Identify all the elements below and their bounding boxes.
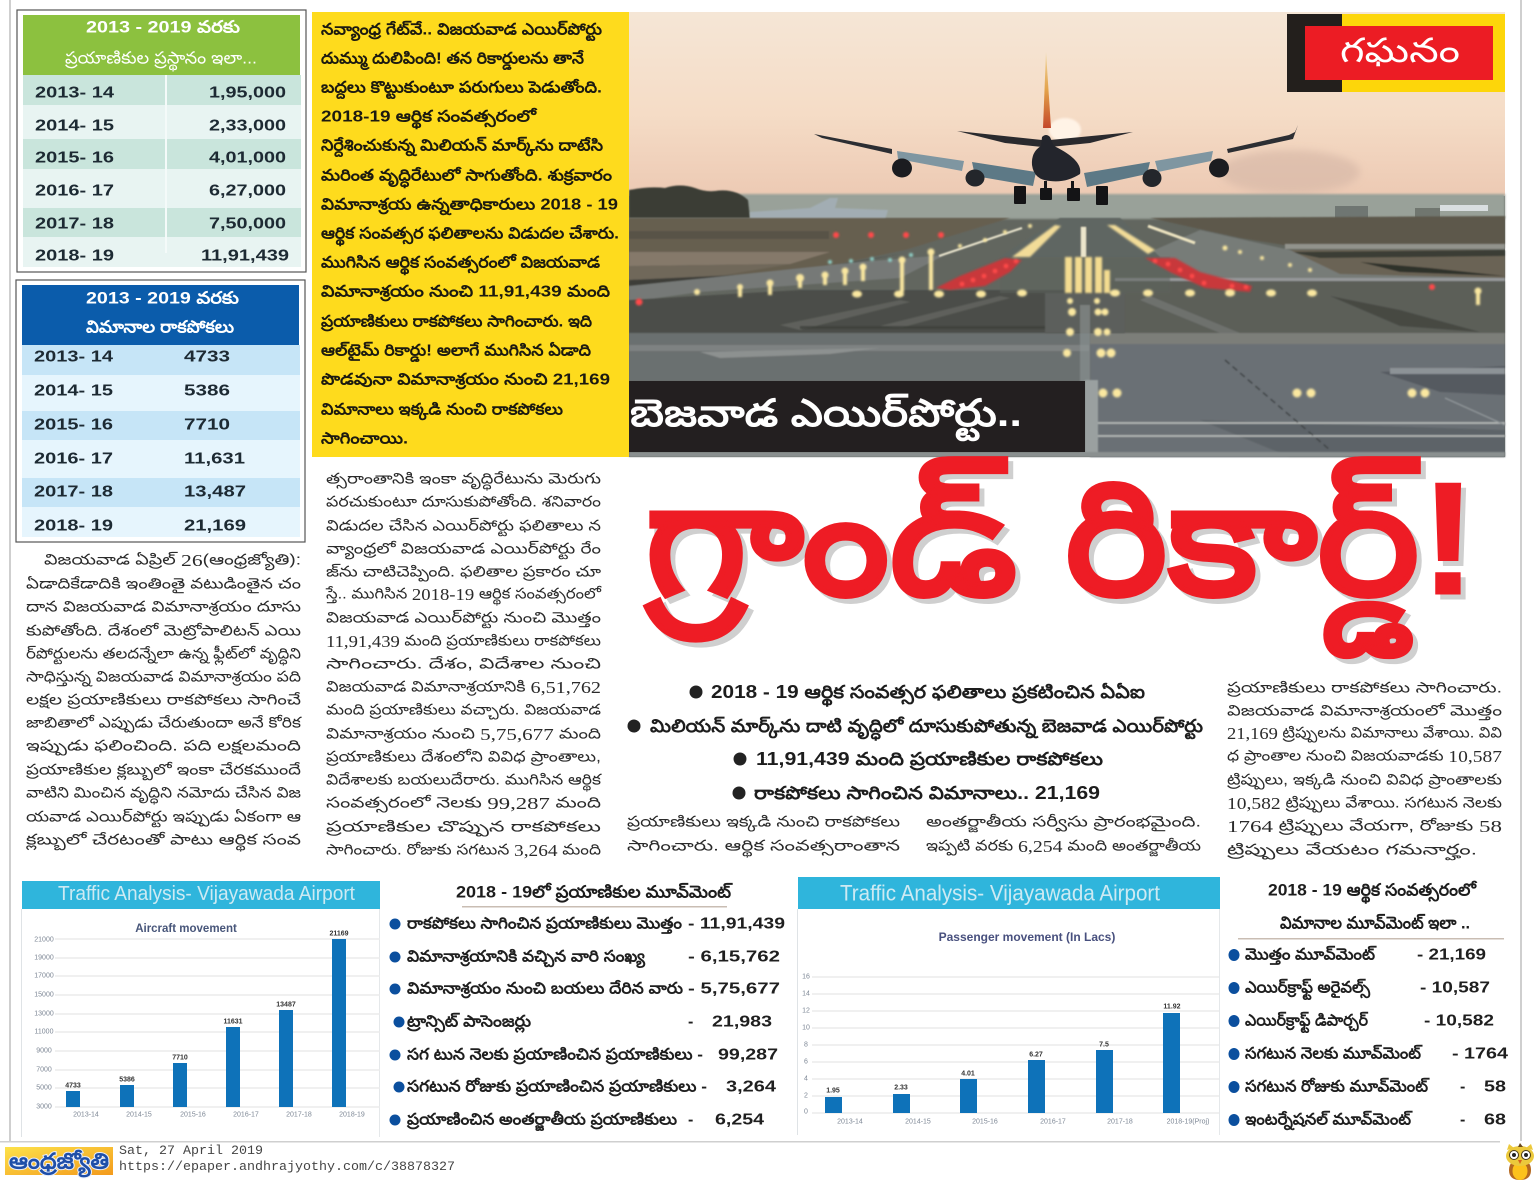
panel: passenger movement chart: Passenger movement (In Lacs) [939, 930, 1115, 944]
panel: yellow intro text: బద్దలు కొట్టుకుంటూ పరుగులు పెడుతోంది. [321, 78, 602, 100]
article text: column 5: విజయవాడ విమానాశ్రయంలో మొత్తం [1227, 702, 1503, 720]
article text: column 3 [627, 814, 900, 858]
panel: aircraft movement chart: 17000 [34, 972, 54, 980]
panel: yellow intro text: విమానాలు ఇక్కడి నుంచి రాకపోకలు [321, 402, 564, 420]
panel: aircraft movement list: - 1764 [1452, 1046, 1508, 1062]
panel: aircraft movement chart: 3000 [36, 1104, 52, 1110]
panel: passenger movement list: - 5,75,677 [688, 980, 780, 998]
article text: column 2: వ్యాంధ్రలో విజయవాడ ఎయిర్‌పోర్టు రేం [326, 540, 601, 560]
article text: column 1: ర్‌పోర్టులను తలదన్నేలా ఉన్న ఫ్లీట్‌లో వృద్ధిని [26, 644, 301, 666]
panel: passenger movement list: సగ టున నెలకు ప్రయాణించిన ప్రయాణికులు - [407, 1046, 703, 1064]
panel: passenger movement list: ట్రాన్సిట్ పాసెంజర్లు [406, 1012, 531, 1034]
aircraft [814, 52, 1298, 205]
panel: aircraft movement list: ఎయిర్‌క్రాఫ్ట్ అరైవల్స్ [1245, 978, 1371, 1000]
article text: column 1: కుపోతోంది. దేశంలో మెట్రోపాలిటన్ ఎయి [26, 622, 301, 640]
panel: flights table [16, 280, 305, 542]
panel: yellow intro text: నిర్దేశించుకున్న మిలియన్ మార్క్‌ను దాటేసి [321, 136, 603, 158]
panel: passenger movement chart: 4 [804, 1076, 808, 1082]
table rows: 2015- 16 [35, 150, 114, 166]
table rows: 1,95,000 [209, 84, 286, 102]
panel: passenger movement list: రాకపోకలు సాగించిన ప్రయాణికులు మొత్తం [407, 916, 682, 934]
table rows: 2016- 17 [35, 182, 114, 200]
panel: aircraft movement chart: 9000 [36, 1048, 52, 1054]
article text: column 5: 10,582 ట్రిప్పులు వేశాయి. సగటున నెలకు [1227, 794, 1502, 814]
panel: passenger movement chart: 2016-17 [1040, 1118, 1066, 1126]
panel: aircraft movement chart: 15000 [34, 992, 54, 998]
article text: column 2: సాగించారు. దేశం, విదేశాల నుంచి [326, 656, 601, 672]
table rows: 2015- 16 [34, 416, 113, 434]
table rows: 2018- 19 [34, 518, 113, 534]
panel: yellow intro text: పొడవునా విమానాశ్రయం నుంచి 21,169 [321, 372, 610, 390]
article text: column 2: స్తే.. ముగిసిన 2018-19 ఆర్థిక సంవత్సరంలో [325, 584, 603, 606]
panel: aircraft movement list: - [1460, 1078, 1465, 1096]
article text: column 2: విజయవాడ విమానాశ్రయానికి 6,51,762 [326, 678, 601, 696]
table rows [23, 75, 301, 267]
panel: passenger movement list: - [688, 1112, 693, 1128]
article text: column 1: వాటిని మించిన వృద్ధిని నమోదు చేసిన విజ [26, 784, 301, 804]
panel: aircraft movement chart: 21000 [34, 936, 54, 944]
panel: passenger movement chart: 8 [804, 1042, 808, 1048]
table header: blue: 2013 - 2019 వరకు [86, 288, 239, 308]
panel: passenger movement list: 21,983 [712, 1014, 772, 1030]
panel: aircraft movement chart: 13487 [276, 1002, 296, 1008]
sub-headlines: మిలియన్ మార్క్‌ను దాటి వృద్ధిలో దూసుకుపోతున్న బెజవాడ ఎయిర్‌పోర్టు [650, 716, 1203, 741]
panel: passenger movement list: ప్రయాణించిన అంతర్జాతీయ ప్రయాణికులు [406, 1110, 677, 1132]
table rows: 2016- 17 [34, 450, 113, 468]
panel: yellow intro text [312, 12, 629, 457]
article text: column 2: 11,91,439 మంది ప్రయాణికులు రాకపోకలు [326, 632, 601, 650]
sub-headlines: 2018 - 19 ఆర్థిక సంవత్సర ఫలితాలు ప్రకటించిన ఏఏఐ [711, 682, 1145, 707]
article text: column 5 [1226, 680, 1503, 860]
panel: passenger movement list: సగటున రోజుకు ప్రయాణించిన ప్రయాణికులు - [407, 1078, 707, 1096]
panel: aircraft movement list: సగటున రోజుకు మూవ్‌మెంట్ [1245, 1078, 1430, 1096]
panel: passenger movement chart: 6 [804, 1058, 808, 1066]
article text: column 5: ప్రయాణికులు రాకపోకలు సాగించారు. [1227, 680, 1502, 698]
panel: aircraft movement list: 58 [1484, 1078, 1506, 1096]
table header: green: ప్రయాణికుల ప్రస్థానం ఇలా... [65, 48, 257, 72]
red approach lights [936, 258, 1022, 290]
sub-headlines: రాకపోకలు సాగించిన విమానాలు.. 21,169 [754, 783, 1100, 803]
panel: passenger movement list: - 6,15,762 [688, 948, 780, 966]
table rows [22, 345, 300, 537]
article text: column 2: ప్రయాణికుల చొప్పున రాకపోకలు [326, 818, 601, 838]
panel: aircraft movement list: ఇంటర్నేషనల్ మూవ్‌మెంట్ [1245, 1110, 1413, 1130]
panel: passenger movement chart: 2013-14 [837, 1118, 863, 1126]
table rows: 2018- 19 [35, 248, 114, 264]
panel: passengers table [17, 10, 306, 272]
panel: passenger movement chart: 2015-16 [972, 1118, 998, 1126]
table rows: 11,631 [184, 450, 245, 468]
badge: ఘనం label: గఘనం [1340, 32, 1460, 70]
runway centre strip [629, 218, 1505, 457]
panel: yellow intro text: దుమ్ము దులిపింది! తన రికార్డులను తానే [321, 50, 585, 70]
article text: column 5: 21,169 ట్రిప్పులను విమానాలు వేశాయి. వివి [1227, 724, 1502, 744]
panel: passenger movement chart [797, 877, 1220, 1135]
article text: column 1 [25, 550, 302, 852]
article text: column 2: విదేశాలకు బయలుదేరారు. ముగిసిన ఆర్థిక [326, 772, 602, 792]
panel: passenger movement chart: 2014-15 [905, 1118, 931, 1126]
main headline: గ్రాండ్ రికార్డ్! [643, 449, 1477, 659]
panel: aircraft movement list: - [1460, 1112, 1465, 1128]
badge: ఘనం label [1287, 14, 1505, 92]
table header: green [23, 15, 300, 75]
list heading: విమానాల మూవ్‌మెంట్ ఇలా .. [1280, 914, 1470, 932]
article text: column 2: విమానాశ్రయం నుంచి 5,75,677 మంది [326, 724, 602, 744]
panel: yellow intro text: ముగిసిన ఆర్థిక సంవత్సరంలో విజయవాడ [321, 252, 600, 276]
panel: passenger movement list: - [688, 1014, 693, 1030]
article text: column 5: ధ ప్రాంతాల నుంచి విజయవాడకు 10,587 [1227, 746, 1503, 766]
panel: aircraft movement list: ఎయిర్‌క్రాఫ్ట్ డిపార్చర్ [1245, 1012, 1368, 1034]
sub-headlines [628, 682, 1203, 803]
panel: passenger movement chart: 2.33 [894, 1084, 908, 1092]
panel: yellow intro text: ఆర్థిక సంవత్సర ఫలితాలను విడుదల చేశారు. [321, 224, 619, 246]
article text: column 1: విజయవాడ ఏప్రిల్ 26 (ఆంధ్రజ్యోతి): [44, 550, 301, 570]
list heading: 2018 - 19లో ప్రయాణికుల మూవ్‌మెంట్ [456, 882, 733, 904]
panel: aircraft movement chart: 11631 [223, 1018, 243, 1026]
panel: passenger movement chart: 2 [804, 1092, 808, 1100]
article text: column 2: జ్‌ను చాటిచెప్పింది. ఫలితాల ప్రకారం చూ [326, 564, 601, 582]
table rows: 5386 [184, 382, 231, 400]
panel: yellow intro text: 2018-19 ఆర్థిక సంవత్సరంలో [321, 106, 538, 130]
article text: column 5: ట్రిప్పులు, ఇక్కడి నుంచి వివిధ ప్రాంతాలకు [1227, 772, 1502, 790]
panel: aircraft movement chart: 2017-18 [286, 1112, 312, 1118]
article text: column 2: సంవత్సరంలో నెలకు 99,287 మంది [326, 794, 602, 814]
panel: passenger movement chart: 12 [802, 1008, 810, 1014]
icon: owl [1506, 1143, 1534, 1180]
panel: yellow intro text: విమానాశ్రయం నుంచి 11,91,439 మంది [321, 284, 611, 302]
ground base [629, 196, 1505, 457]
panel: aircraft movement chart: Traffic Analysis- Vijayawada Airport [58, 883, 355, 905]
article text: column 1: ప్రయాణికుల క్లబ్బులో ఇంకా చేరకముందే [26, 760, 301, 780]
article text: column 1: లక్షల ప్రయాణికులు రాకపోకలు సాగించే [26, 692, 301, 710]
article text: column 4: ఇప్పటి వరకు 6,254 మంది అంతర్జాతీయ [926, 836, 1201, 856]
table rows: 2,33,000 [209, 118, 286, 134]
footer: date and url [119, 1144, 455, 1174]
table rows: 7710 [184, 416, 230, 434]
panel: aircraft movement list [1228, 880, 1508, 1130]
panel: aircraft movement chart [21, 881, 380, 1137]
article text: column 3: సాగించారు. ఆర్థిక సంవత్సరాంతాన [627, 838, 900, 858]
panel: aircraft movement chart: 2018-19 [339, 1112, 365, 1118]
table header: blue: విమానాల రాకపోకలు [86, 318, 234, 336]
panel: passenger movement chart: 14 [802, 990, 810, 998]
article text: column 1: ఏడాదికేడాదికి ఇంతింతై వటుడింతైన చం [26, 576, 301, 594]
table rows: 13,487 [184, 484, 246, 500]
panel: aircraft movement chart: 21169 [329, 930, 349, 938]
article text: column 4: అంతర్జాతీయ సర్వీసు ప్రారంభమైంది. [926, 812, 1201, 832]
footer: date and url: https://epaper.andhrajyothy.com/c/38878327 [119, 1160, 455, 1174]
panel: yellow intro text: ఆల్‌టైమ్ రికార్డు! అలాగే ముగిసిన ఏడాది [321, 342, 592, 362]
article text: column 1: ఇప్పుడు ఫలించింది. పది లక్షలమంది [26, 738, 302, 756]
panel: passenger movement chart: 16 [802, 974, 810, 980]
article text: column 2: సాగించారు. రోజుకు సగటున 3,264 మంది [326, 840, 601, 860]
article text: column 2: పరచుకుంటూ దూసుకుపోతోంది. శనివారం [326, 492, 601, 510]
table rows: 2014- 15 [35, 118, 114, 134]
fuselage [1032, 135, 1080, 181]
yellow streaks [1012, 225, 1061, 257]
distant tree line [629, 186, 1505, 220]
table rows: 4,01,000 [209, 150, 286, 166]
panel: passenger movement list: విమానాశ్రయానికి వచ్చిన వారి సంఖ్య [407, 948, 646, 968]
panel: passenger movement chart: 0 [804, 1108, 808, 1116]
left fields [629, 218, 1090, 381]
panel: aircraft movement chart: 4733 [65, 1082, 81, 1090]
tailplane [957, 131, 1042, 147]
table rows: 2014- 15 [34, 382, 113, 400]
table rows: 2013- 14 [34, 348, 113, 366]
photo caption bar [629, 381, 1085, 452]
panel: passenger movement chart: 4.01 [961, 1070, 975, 1078]
panel: passenger movement chart: 2017-18 [1107, 1118, 1133, 1126]
panel: aircraft movement chart: 2015-16 [180, 1112, 206, 1118]
article text: column 5: ట్రిప్పులు వేయటం గమనార్హం. [1226, 842, 1477, 860]
panel: aircraft movement list: సగటున నెలకు మూవ్‌మెంట్ [1245, 1044, 1423, 1062]
article text: column 2: ప్రయాణికులు దేశంలోని వివిధ ప్రాంతాలు, [326, 748, 601, 766]
panel: yellow intro text: మరింత వృద్ధిరేటులో సాగుతోంది. శుక్రవారం [321, 166, 612, 188]
photo: aircraft landing over runway [629, 12, 1505, 457]
teal taxi lights [828, 253, 913, 264]
table header: blue [22, 285, 299, 345]
panel: aircraft movement list: - 10,582 [1424, 1012, 1494, 1030]
panel: passenger movement list: 3,264 [726, 1078, 776, 1096]
article text: column 3: ప్రయాణికులు ఇక్కడి నుంచి రాకపోకలు [627, 814, 900, 832]
sub-headlines: 11,91,439 మంది ప్రయాణికుల రాకపోకలు [756, 749, 1103, 771]
photo caption bar: బెజవాడ ఎయిర్‌పోర్టు.. [630, 393, 1022, 442]
panel: passenger movement list: 99,287 [718, 1046, 778, 1064]
table rows: 4733 [184, 348, 231, 366]
table rows: 2013- 14 [35, 84, 114, 102]
panel: aircraft movement chart: Aircraft movement [135, 923, 237, 935]
panel: aircraft movement chart: 2016-17 [233, 1112, 259, 1118]
article text: column 1: సాధిస్తున్న విజయవాడ విమానాశ్రయం పది [26, 668, 301, 688]
panel: passenger movement chart: 11.92 [1163, 1004, 1181, 1010]
table rows: 2017- 18 [34, 484, 113, 500]
panel: passenger movement chart: 2018-19(Proj) [1167, 1118, 1209, 1126]
panel: aircraft movement chart: 2014-15 [126, 1112, 152, 1118]
footer: date and url: Sat, 27 April 2019 [119, 1144, 263, 1158]
panel: yellow intro text: ప్రయాణికులు రాకపోకలు సాగించారు. ఇది [320, 314, 593, 332]
panel: passenger movement chart: 10 [802, 1024, 810, 1032]
table rows: 21,169 [184, 518, 246, 534]
panel: yellow intro text: విమానాశ్రయ ఉన్నతాధికారులు 2018 - 19 [321, 196, 618, 216]
panel: aircraft movement chart: 5000 [36, 1084, 52, 1092]
list heading: 2018 - 19 ఆర్థిక సంవత్సరంలో [1268, 880, 1478, 904]
table rows: 6,27,000 [209, 182, 286, 200]
table rows: 7,50,000 [209, 216, 286, 232]
panel: passenger movement chart: Traffic Analysis- Vijayawada Airport [840, 880, 1160, 906]
panel: passenger movement list [390, 882, 785, 1132]
panel: yellow intro text: నవ్యాంధ్ర గేట్‌వే.. విజయవాడ ఎయిర్‌పోర్టు [321, 20, 602, 42]
panel: aircraft movement chart: 2013-14 [73, 1112, 99, 1118]
panel: aircraft movement chart: 7710 [172, 1054, 188, 1062]
panel: aircraft movement list: - 10,587 [1420, 980, 1490, 996]
article text: column 2: విడుదల చేసిన ఎయిర్‌పోర్టు ఫలితాలు న [326, 518, 601, 536]
article text: column 1: దాన విజయవాడ విమానాశ్రయం దూసు [26, 598, 301, 616]
article text: column 2: విజయవాడ ఎయిర్‌పోర్టు నుంచి మొత్తం [326, 610, 601, 628]
panel: aircraft movement list: 68 [1484, 1112, 1506, 1128]
list heading [1238, 880, 1504, 940]
engines [892, 158, 912, 178]
panel: passenger movement chart: 1.95 [826, 1088, 840, 1094]
panel: passenger movement chart: 6.27 [1029, 1052, 1043, 1058]
article text: column 2: త్సరాంతానికి ఇంకా వృద్ధిరేటును మెరుగు [326, 470, 601, 490]
article text: column 1: యవాడ ఎయిర్‌పోర్టు ఇప్పుడు ఏకంగా ఆ [26, 808, 301, 828]
wings [814, 134, 892, 154]
right fields [1090, 216, 1505, 457]
article text: column 1: క్లబ్బులో చేరటంతో పాటు ఆర్థిక సంవ [25, 830, 301, 852]
table rows: 2017- 18 [35, 216, 114, 232]
main headline: గ్రాండ్ రికార్డ్! [648, 454, 1482, 664]
panel: aircraft movement list: - 21,169 [1417, 946, 1486, 964]
article text: column 4 [926, 812, 1201, 856]
panel: aircraft movement chart: 13000 [34, 1010, 54, 1018]
article text: column 2 [325, 470, 603, 860]
runway lights [636, 224, 1482, 398]
panel: aircraft movement chart: 11000 [35, 1028, 54, 1036]
bars [825, 1013, 1180, 1113]
panel: passenger movement chart: 7.5 [1099, 1042, 1109, 1048]
panel: passenger movement list: 6,254 [715, 1112, 764, 1128]
panel: aircraft movement chart: 19000 [34, 954, 54, 962]
panel: aircraft movement chart: 5386 [119, 1076, 135, 1084]
article text: column 1: జాబితాలో ఎప్పుడు చేరుతుందా అనే కోరిక [26, 714, 302, 734]
panel: passenger movement list: విమానాశ్రయం నుంచి బయలు దేరిన వారు [407, 980, 684, 998]
footer: newspaper logo: ఆంధ్రజ్యోతి [9, 1148, 109, 1178]
table header: green: 2013 - 2019 వరకు [86, 18, 240, 36]
panel: aircraft movement chart: 7000 [36, 1066, 52, 1074]
article text: column 2: మంది ప్రయాణికులు వచ్చారు. విజయవాడ [326, 702, 601, 720]
panel: yellow intro text: సాగించాయి. [321, 430, 408, 448]
bars [66, 939, 346, 1107]
table rows: 11,91,439 [201, 248, 289, 264]
landing gear [1014, 181, 1108, 205]
panel: aircraft movement list: మొత్తం మూవ్‌మెంట్ [1245, 946, 1377, 966]
article text: column 5: 1764 ట్రిప్పులు వేయగా, రోజుకు 58 [1227, 816, 1502, 836]
panel: passenger movement list: - 11,91,439 [688, 916, 785, 932]
